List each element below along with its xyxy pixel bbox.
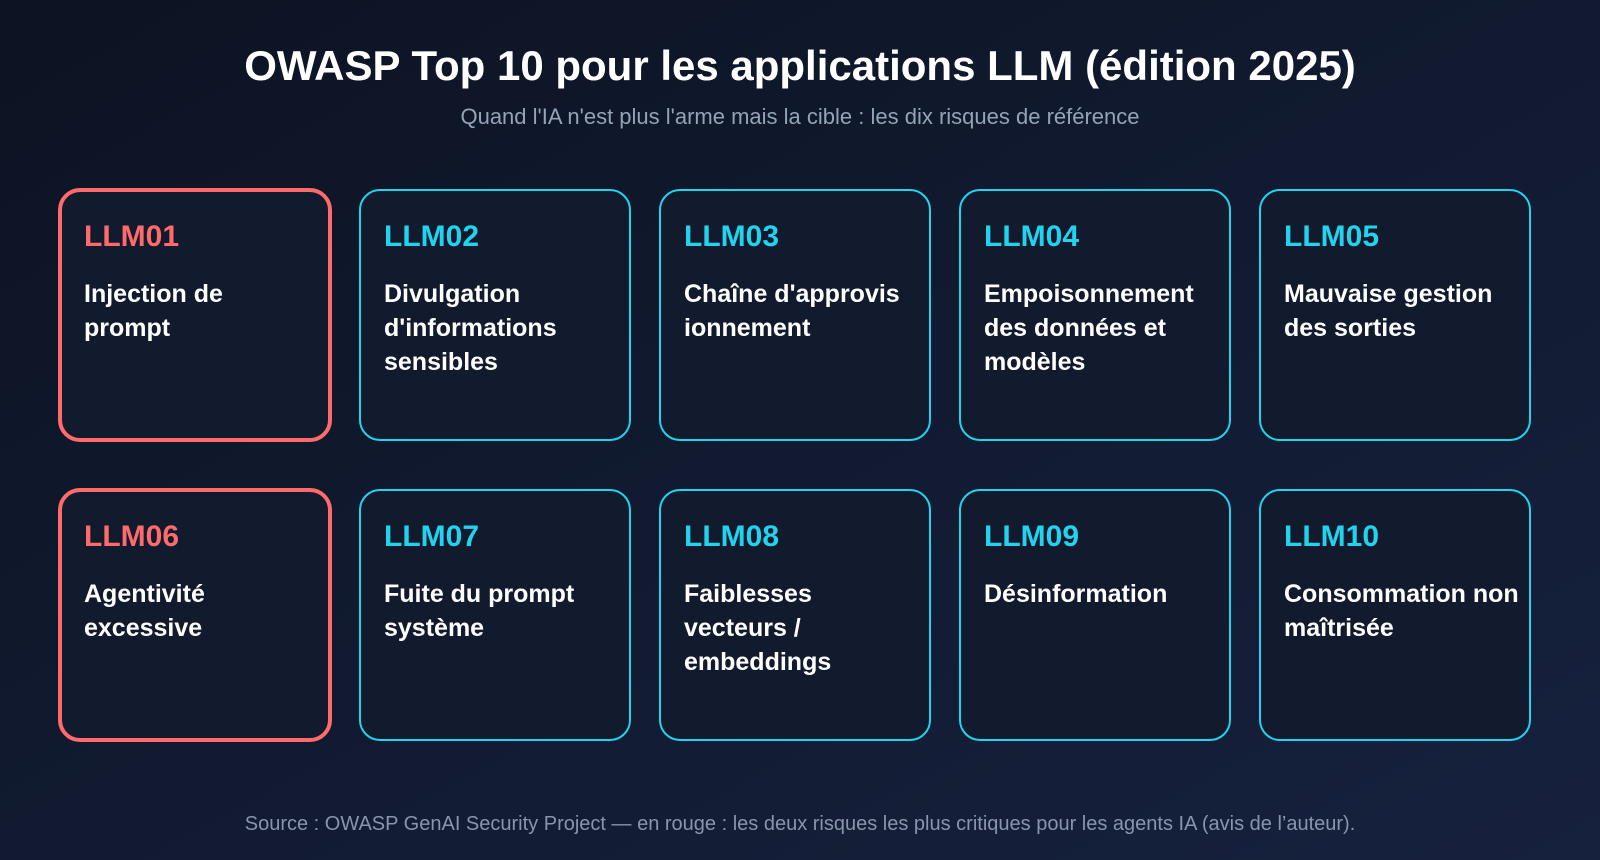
card: LLM07: système: [384, 614, 484, 642]
card: LLM08: Faiblesses: [684, 580, 812, 608]
card: LLM01: [60, 190, 330, 440]
card: LLM03: [660, 190, 930, 440]
card: LLM08: [660, 490, 930, 740]
card: LLM10: LLM10: [1284, 520, 1379, 553]
card: LLM05: Mauvaise gestion: [1284, 280, 1492, 308]
card: LLM01: prompt: [84, 314, 171, 342]
card: LLM02: Divulgation: [384, 280, 520, 308]
source footnote: Source : OWASP GenAI Security Project — en rouge : les deux risques les plus critiques pour les agents IA (avis de l’auteur).: [245, 813, 1355, 835]
card: LLM07: Fuite du prompt: [384, 580, 575, 608]
card: LLM08: vecteurs /: [684, 614, 801, 642]
card: LLM04: Empoisonnement: [984, 280, 1194, 308]
card: LLM02: d'informations: [384, 314, 557, 342]
card: LLM02: sensibles: [384, 348, 498, 376]
card: LLM04: LLM04: [984, 220, 1079, 253]
card: LLM04: [960, 190, 1230, 440]
card: LLM10: Consommation non: [1284, 580, 1519, 608]
card: LLM06: excessive: [84, 614, 202, 642]
card: LLM05: des sorties: [1284, 314, 1416, 342]
card: LLM09: LLM09: [984, 520, 1079, 553]
card: LLM07: [360, 490, 630, 740]
card: LLM07: LLM07: [384, 520, 479, 553]
card: LLM03: ionnement: [684, 314, 811, 342]
card: LLM06: Agentivité: [84, 580, 205, 608]
card: LLM09: [960, 490, 1230, 740]
card: LLM01: LLM01: [84, 220, 179, 253]
card: LLM01: Injection de: [84, 280, 223, 308]
card: LLM03: Chaîne d'approvis: [684, 280, 900, 308]
card: LLM05: [1260, 190, 1530, 440]
card: LLM06: [60, 490, 330, 740]
title: OWASP Top 10 pour les applications LLM (édition 2025): [244, 42, 1356, 89]
card: LLM06: LLM06: [84, 520, 179, 553]
card: LLM03: LLM03: [684, 220, 779, 253]
card: LLM10: [1260, 490, 1530, 740]
card: LLM09: Désinformation: [984, 580, 1167, 608]
card: LLM08: embeddings: [684, 648, 831, 676]
card: LLM08: LLM08: [684, 520, 779, 553]
card: LLM02: LLM02: [384, 220, 479, 253]
card: LLM10: maîtrisée: [1284, 614, 1394, 642]
card: LLM04: modèles: [984, 348, 1085, 376]
subtitle: Quand l'IA n'est plus l'arme mais la cible : les dix risques de référence: [460, 104, 1140, 129]
card: LLM04: des données et: [984, 314, 1167, 342]
card: LLM02: [360, 190, 630, 440]
card: LLM05: LLM05: [1284, 220, 1379, 253]
